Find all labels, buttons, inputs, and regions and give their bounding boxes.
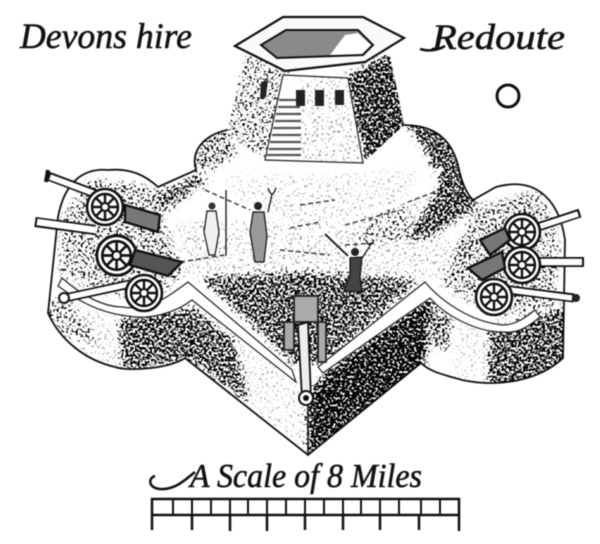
figure: soldier left — [204, 190, 226, 256]
right bastion floor — [440, 190, 560, 318]
figures — [204, 188, 374, 292]
tower base fill — [227, 55, 404, 163]
minor ticks — [173, 499, 440, 515]
mound left edge shading — [190, 128, 236, 172]
mound right dark slope — [404, 122, 478, 240]
corner edge — [307, 400, 309, 455]
cannon: middle left — [35, 222, 182, 276]
tower front face — [265, 75, 363, 163]
right cannons — [468, 213, 584, 315]
title: Devons hire: Devons hire — [19, 16, 192, 56]
front face grain — [300, 75, 366, 165]
right face — [346, 50, 410, 168]
cannon: top left — [46, 170, 160, 232]
left wall — [40, 300, 100, 345]
scale caption: A Scale of 8 Miles — [188, 458, 422, 495]
hexagonal parapet — [235, 17, 404, 71]
muzzle ring — [299, 391, 313, 405]
cannon: bottom left — [59, 275, 162, 311]
left bastion floor — [60, 178, 185, 302]
title: Redoute: Redoute — [431, 17, 565, 57]
fort base silhouette — [48, 125, 565, 455]
central cannon — [284, 296, 326, 405]
redoubt tower — [222, 17, 410, 168]
parapet band: left — [58, 278, 296, 382]
icon: small circle — [497, 85, 519, 107]
frame — [151, 499, 460, 515]
scale bar — [151, 498, 460, 531]
mound terrace stipple — [225, 170, 420, 225]
ground dashes — [180, 190, 440, 262]
left cannons — [35, 170, 182, 311]
parapet opening — [261, 30, 373, 58]
engraved shading — [40, 122, 570, 458]
central ground stipple — [175, 220, 490, 278]
parapet band: right — [318, 282, 540, 373]
major ticks — [152, 498, 459, 531]
figure: gunner with linstock — [325, 234, 374, 292]
cannon: top right — [480, 213, 580, 255]
tower side shading — [228, 54, 405, 162]
right wall — [430, 305, 452, 350]
terrace line — [365, 167, 442, 212]
cannon: bottom right — [476, 279, 580, 315]
V wall left face — [188, 305, 250, 404]
carriage — [284, 296, 326, 362]
central dark floor — [200, 272, 420, 365]
front face hatch — [267, 100, 301, 155]
left face — [228, 55, 290, 158]
V wall right face — [308, 295, 432, 458]
loopholes — [260, 80, 344, 106]
cannon: middle right — [468, 247, 584, 283]
barrel — [298, 322, 311, 398]
figure: soldier right — [250, 188, 276, 262]
